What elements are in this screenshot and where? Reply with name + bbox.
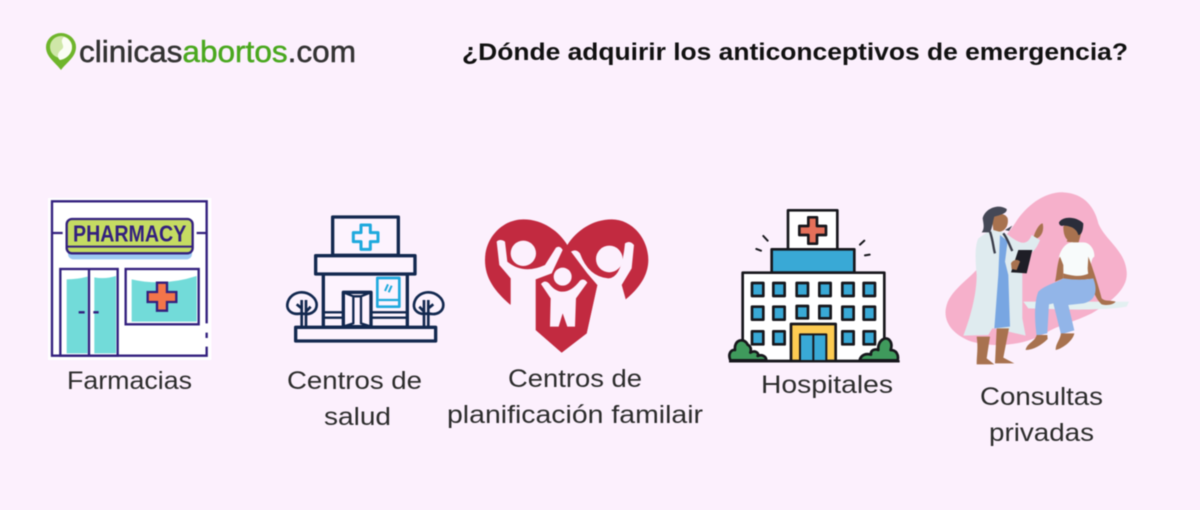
label: Centros de salud: Centros de xyxy=(287,367,422,395)
label: Centros de salud: salud xyxy=(324,403,391,431)
logo wordmark: clinicasabortos.com xyxy=(79,34,356,69)
icon: hospital building xyxy=(729,210,900,361)
icon: red heart with family xyxy=(485,219,648,353)
panel: centros de salud xyxy=(287,217,443,431)
logo: clinicasabortos.com xyxy=(46,33,356,70)
illustration: doctor and patient xyxy=(946,192,1129,364)
label: Centros de planificación familair: Centros de xyxy=(508,365,642,393)
label: Hospitales: Hospitales xyxy=(761,371,893,399)
icon: pharmacy storefront: PHARMACY xyxy=(73,221,186,247)
icon: health centre building xyxy=(287,217,443,341)
label: Consultas privadas: Consultas xyxy=(980,383,1103,411)
label: Centros de salud xyxy=(287,367,422,431)
icon: green location pin xyxy=(46,33,76,70)
label: Consultas privadas: privadas xyxy=(989,419,1094,447)
panel: hospitales xyxy=(729,210,900,399)
panel: centros de planificación familiar xyxy=(447,219,703,429)
panel: consultas privadas xyxy=(946,192,1129,447)
icon: pharmacy storefront xyxy=(48,198,211,360)
panel: farmacias xyxy=(48,198,211,395)
title: ¿Dónde adquirir los anticonceptivos de emergencia? xyxy=(462,39,1128,66)
label: Consultas privadas xyxy=(980,383,1103,447)
label: Centros de planificación familair xyxy=(447,365,703,429)
label: Farmacias: Farmacias xyxy=(67,367,192,395)
label: Centros de planificación familair: planificación familair xyxy=(447,401,703,429)
